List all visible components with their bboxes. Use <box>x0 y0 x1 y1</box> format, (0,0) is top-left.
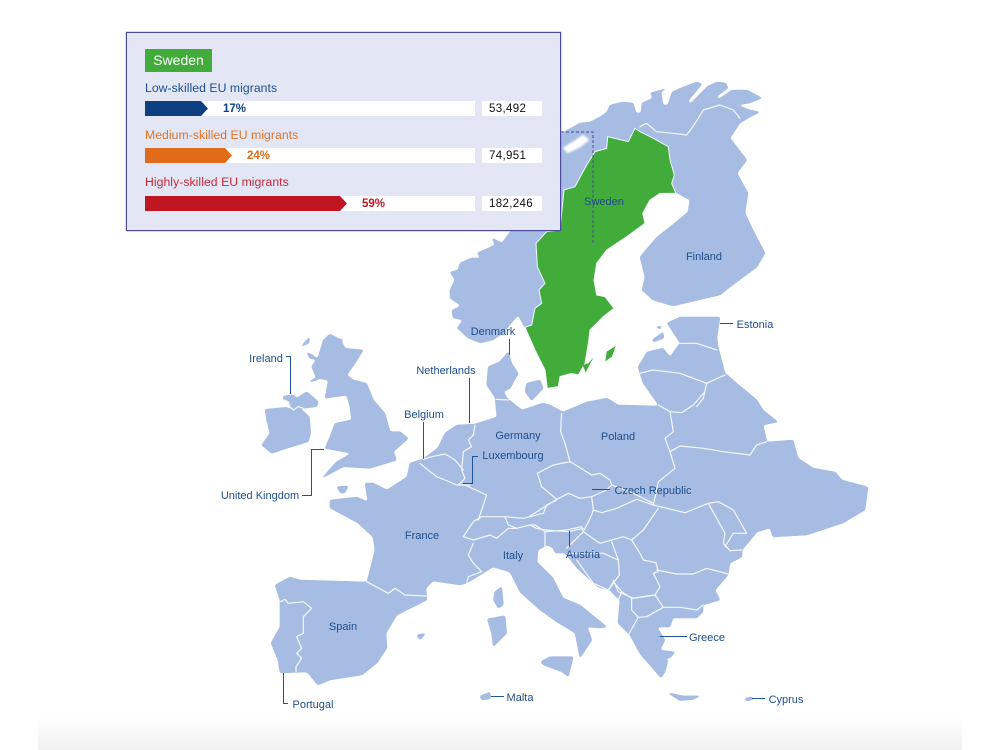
Northern Ireland <box>283 392 318 410</box>
highly-skilled bar: 59% <box>362 198 385 210</box>
continental Europe <box>271 317 868 685</box>
southern Norway <box>450 200 590 343</box>
highly-skilled bar <box>145 196 475 211</box>
Gotland <box>605 346 616 361</box>
country labels: Netherlands <box>416 365 476 377</box>
country labels: France <box>405 530 439 542</box>
Channel islands <box>337 486 348 493</box>
Mediterranean islands <box>417 587 507 700</box>
country labels: Portugal <box>293 699 333 711</box>
country labels: Estonia <box>737 319 774 331</box>
Ireland <box>262 407 311 453</box>
medium-skilled label: Medium-skilled EU migrants <box>145 128 298 142</box>
medium-skilled bar: 24% <box>247 150 270 162</box>
Norwegian fjord <box>563 135 589 153</box>
low-skilled label: Low-skilled EU migrants <box>145 81 277 95</box>
country labels: Sweden <box>584 196 624 208</box>
Sweden highlighted <box>525 128 676 388</box>
country labels: Poland <box>601 431 635 443</box>
United Kingdom <box>312 329 408 478</box>
medium-skilled bar <box>145 148 475 163</box>
country tag <box>145 49 212 72</box>
country labels: Denmark <box>471 326 516 338</box>
highly-skilled label: Highly-skilled EU migrants <box>145 175 289 189</box>
country labels: Ireland <box>249 353 283 365</box>
land masses <box>262 82 868 701</box>
country labels: Belgium <box>404 409 444 421</box>
country labels: Greece <box>689 632 725 644</box>
country labels: Luxembourg <box>482 450 544 462</box>
low-skilled bar: 17% <box>223 103 246 115</box>
country labels: Czech Republic <box>614 485 692 497</box>
country labels <box>221 196 804 711</box>
country labels: Spain <box>329 621 357 633</box>
highly-skilled value <box>482 196 542 211</box>
footer band <box>38 716 962 750</box>
country labels: Germany <box>495 430 541 442</box>
low-skilled bar <box>145 101 475 116</box>
panel: Sweden migrants breakdown <box>126 32 561 231</box>
country labels: Italy <box>503 550 524 562</box>
country labels: Finland <box>686 251 722 263</box>
country labels: United Kingdom <box>221 490 299 502</box>
medium-skilled value: 74,951 <box>489 150 526 162</box>
low-skilled value: 53,492 <box>489 103 526 115</box>
leader lines <box>284 324 765 704</box>
Zealand <box>525 380 543 401</box>
British Isles and Denmark <box>262 329 543 493</box>
country labels: Austria <box>566 549 601 561</box>
low-skilled value <box>482 101 542 116</box>
dashed connector from panel to Sweden <box>561 132 593 243</box>
country borders <box>281 105 767 672</box>
highly-skilled value: 182,246 <box>489 198 533 210</box>
Baltic islands <box>652 332 664 342</box>
country labels: Malta <box>507 692 534 704</box>
country labels: Cyprus <box>769 694 804 706</box>
northern Norway and Finland <box>510 82 765 306</box>
Oland <box>583 358 593 372</box>
medium-skilled value <box>482 148 542 163</box>
country tag: Sweden <box>153 52 204 68</box>
Jutland <box>487 352 518 400</box>
